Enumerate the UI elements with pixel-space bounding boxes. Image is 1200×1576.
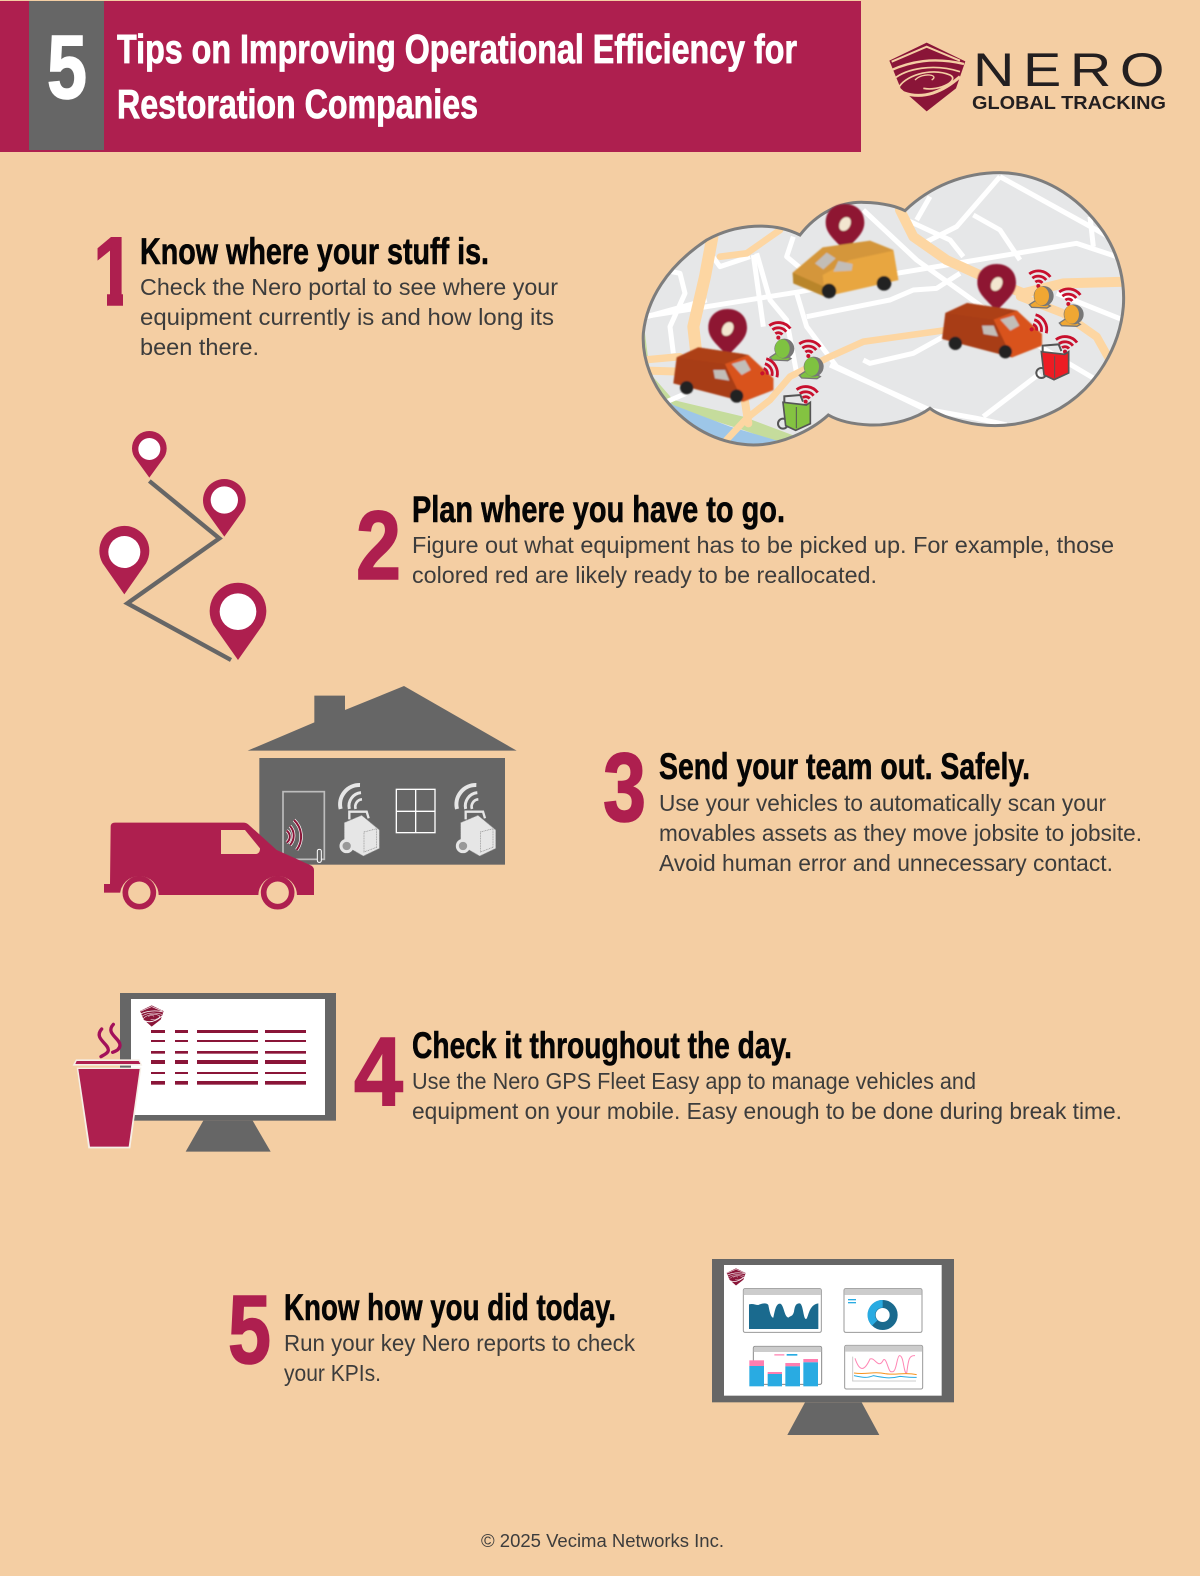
tip 2 body: colored red are likely ready to be reallocated. xyxy=(412,562,877,588)
logo: Nero Global Tracking xyxy=(889,43,1166,113)
tip 5 body: your KPIs. xyxy=(284,1360,381,1386)
logo shield icon xyxy=(889,43,965,111)
tip 5 number: 5 xyxy=(228,1275,271,1384)
tip 1 body: Check the Nero portal to see where your xyxy=(140,274,558,300)
header number: 5 xyxy=(47,18,87,118)
tip 3 number: 3 xyxy=(603,733,646,842)
tip 4 body: Use the Nero GPS Fleet Easy app to manage vehicles and xyxy=(412,1068,976,1094)
pin 3 xyxy=(99,526,149,594)
tip 3 heading: Send your team out. Safely. xyxy=(659,746,1030,787)
tip 2 body: Figure out what equipment has to be picked up. For example, those xyxy=(412,532,1114,558)
small logo xyxy=(140,1005,164,1027)
coffee cup xyxy=(73,1059,142,1148)
tip 2 number: 2 xyxy=(356,491,401,600)
delivery van, right xyxy=(942,264,1042,358)
line chart window xyxy=(845,1345,923,1389)
coffee steam xyxy=(99,1024,120,1057)
pin 4 xyxy=(210,583,266,660)
route line xyxy=(127,481,231,660)
tip 1 xyxy=(98,236,558,355)
monitor xyxy=(120,993,336,1152)
footer copyright: © 2025 Vecima Networks Inc. xyxy=(481,1531,724,1551)
door xyxy=(283,792,324,862)
monitor frame xyxy=(712,1259,954,1435)
tip 5 xyxy=(228,1275,635,1386)
tip 2 xyxy=(356,489,1114,600)
tip 5 body xyxy=(284,1330,635,1386)
title line one: Tips on Improving Operational Efficiency for xyxy=(117,26,797,72)
header banner xyxy=(0,1,861,152)
tip 2 body xyxy=(412,532,1114,588)
tip 3 body: Avoid human error and unnecessary contact. xyxy=(659,850,1113,876)
tip 3 body: Use your vehicles to automatically scan your xyxy=(659,790,1106,816)
equipment with signal, right xyxy=(456,785,496,856)
tip 1 body: equipment currently is and how long its xyxy=(140,304,554,330)
tip 1 body: been there. xyxy=(140,334,259,360)
tip 4 body xyxy=(412,1068,1122,1124)
tip 2 heading: Plan where you have to go. xyxy=(412,489,785,530)
tip 4 xyxy=(354,1017,1122,1126)
tip 5 heading: Know how you did today. xyxy=(284,1287,616,1328)
tip 5 body: Run your key Nero reports to check xyxy=(284,1330,635,1356)
tip 4 heading: Check it throughout the day. xyxy=(412,1025,792,1066)
window xyxy=(396,789,435,833)
area chart window xyxy=(743,1289,821,1332)
house wall xyxy=(259,758,505,865)
tracked equipment with wifi signals xyxy=(755,270,1084,430)
tip 1 number: 1 xyxy=(93,217,135,326)
title line two: Restoration Companies xyxy=(117,81,478,127)
logo wordmark: NERO xyxy=(973,45,1165,97)
delivery van, left xyxy=(673,309,773,403)
small logo xyxy=(727,1268,746,1285)
map base xyxy=(644,174,1122,444)
dashboard monitor illustration xyxy=(712,1259,954,1435)
house and van illustration xyxy=(104,686,517,907)
tip 1 body xyxy=(140,274,558,360)
logo tagline: GLOBAL TRACKING xyxy=(972,93,1166,113)
route with map pins xyxy=(99,431,266,660)
tip 4 body: equipment on your mobile. Easy enough to be done during break time. xyxy=(412,1098,1122,1124)
tip 3 xyxy=(603,733,1142,876)
tip 3 body: movables assets as they move jobsite to jobsite. xyxy=(659,820,1142,846)
report table rows xyxy=(151,1030,306,1085)
pin 2 xyxy=(203,479,246,537)
map outline xyxy=(643,173,1124,445)
monitor and coffee illustration xyxy=(73,993,336,1152)
map illustration xyxy=(630,160,1130,450)
tip 4 number: 4 xyxy=(354,1017,403,1126)
donut chart window xyxy=(844,1289,922,1332)
header number box xyxy=(29,1,104,150)
tip 1 heading: Know where your stuff is. xyxy=(140,231,489,272)
house roof xyxy=(248,686,517,751)
bar chart window xyxy=(749,1346,822,1386)
delivery van, top xyxy=(793,204,898,298)
equipment with signal, left xyxy=(340,785,379,856)
van xyxy=(104,823,314,907)
tip 3 body xyxy=(659,790,1142,876)
pin 1 xyxy=(132,431,167,478)
